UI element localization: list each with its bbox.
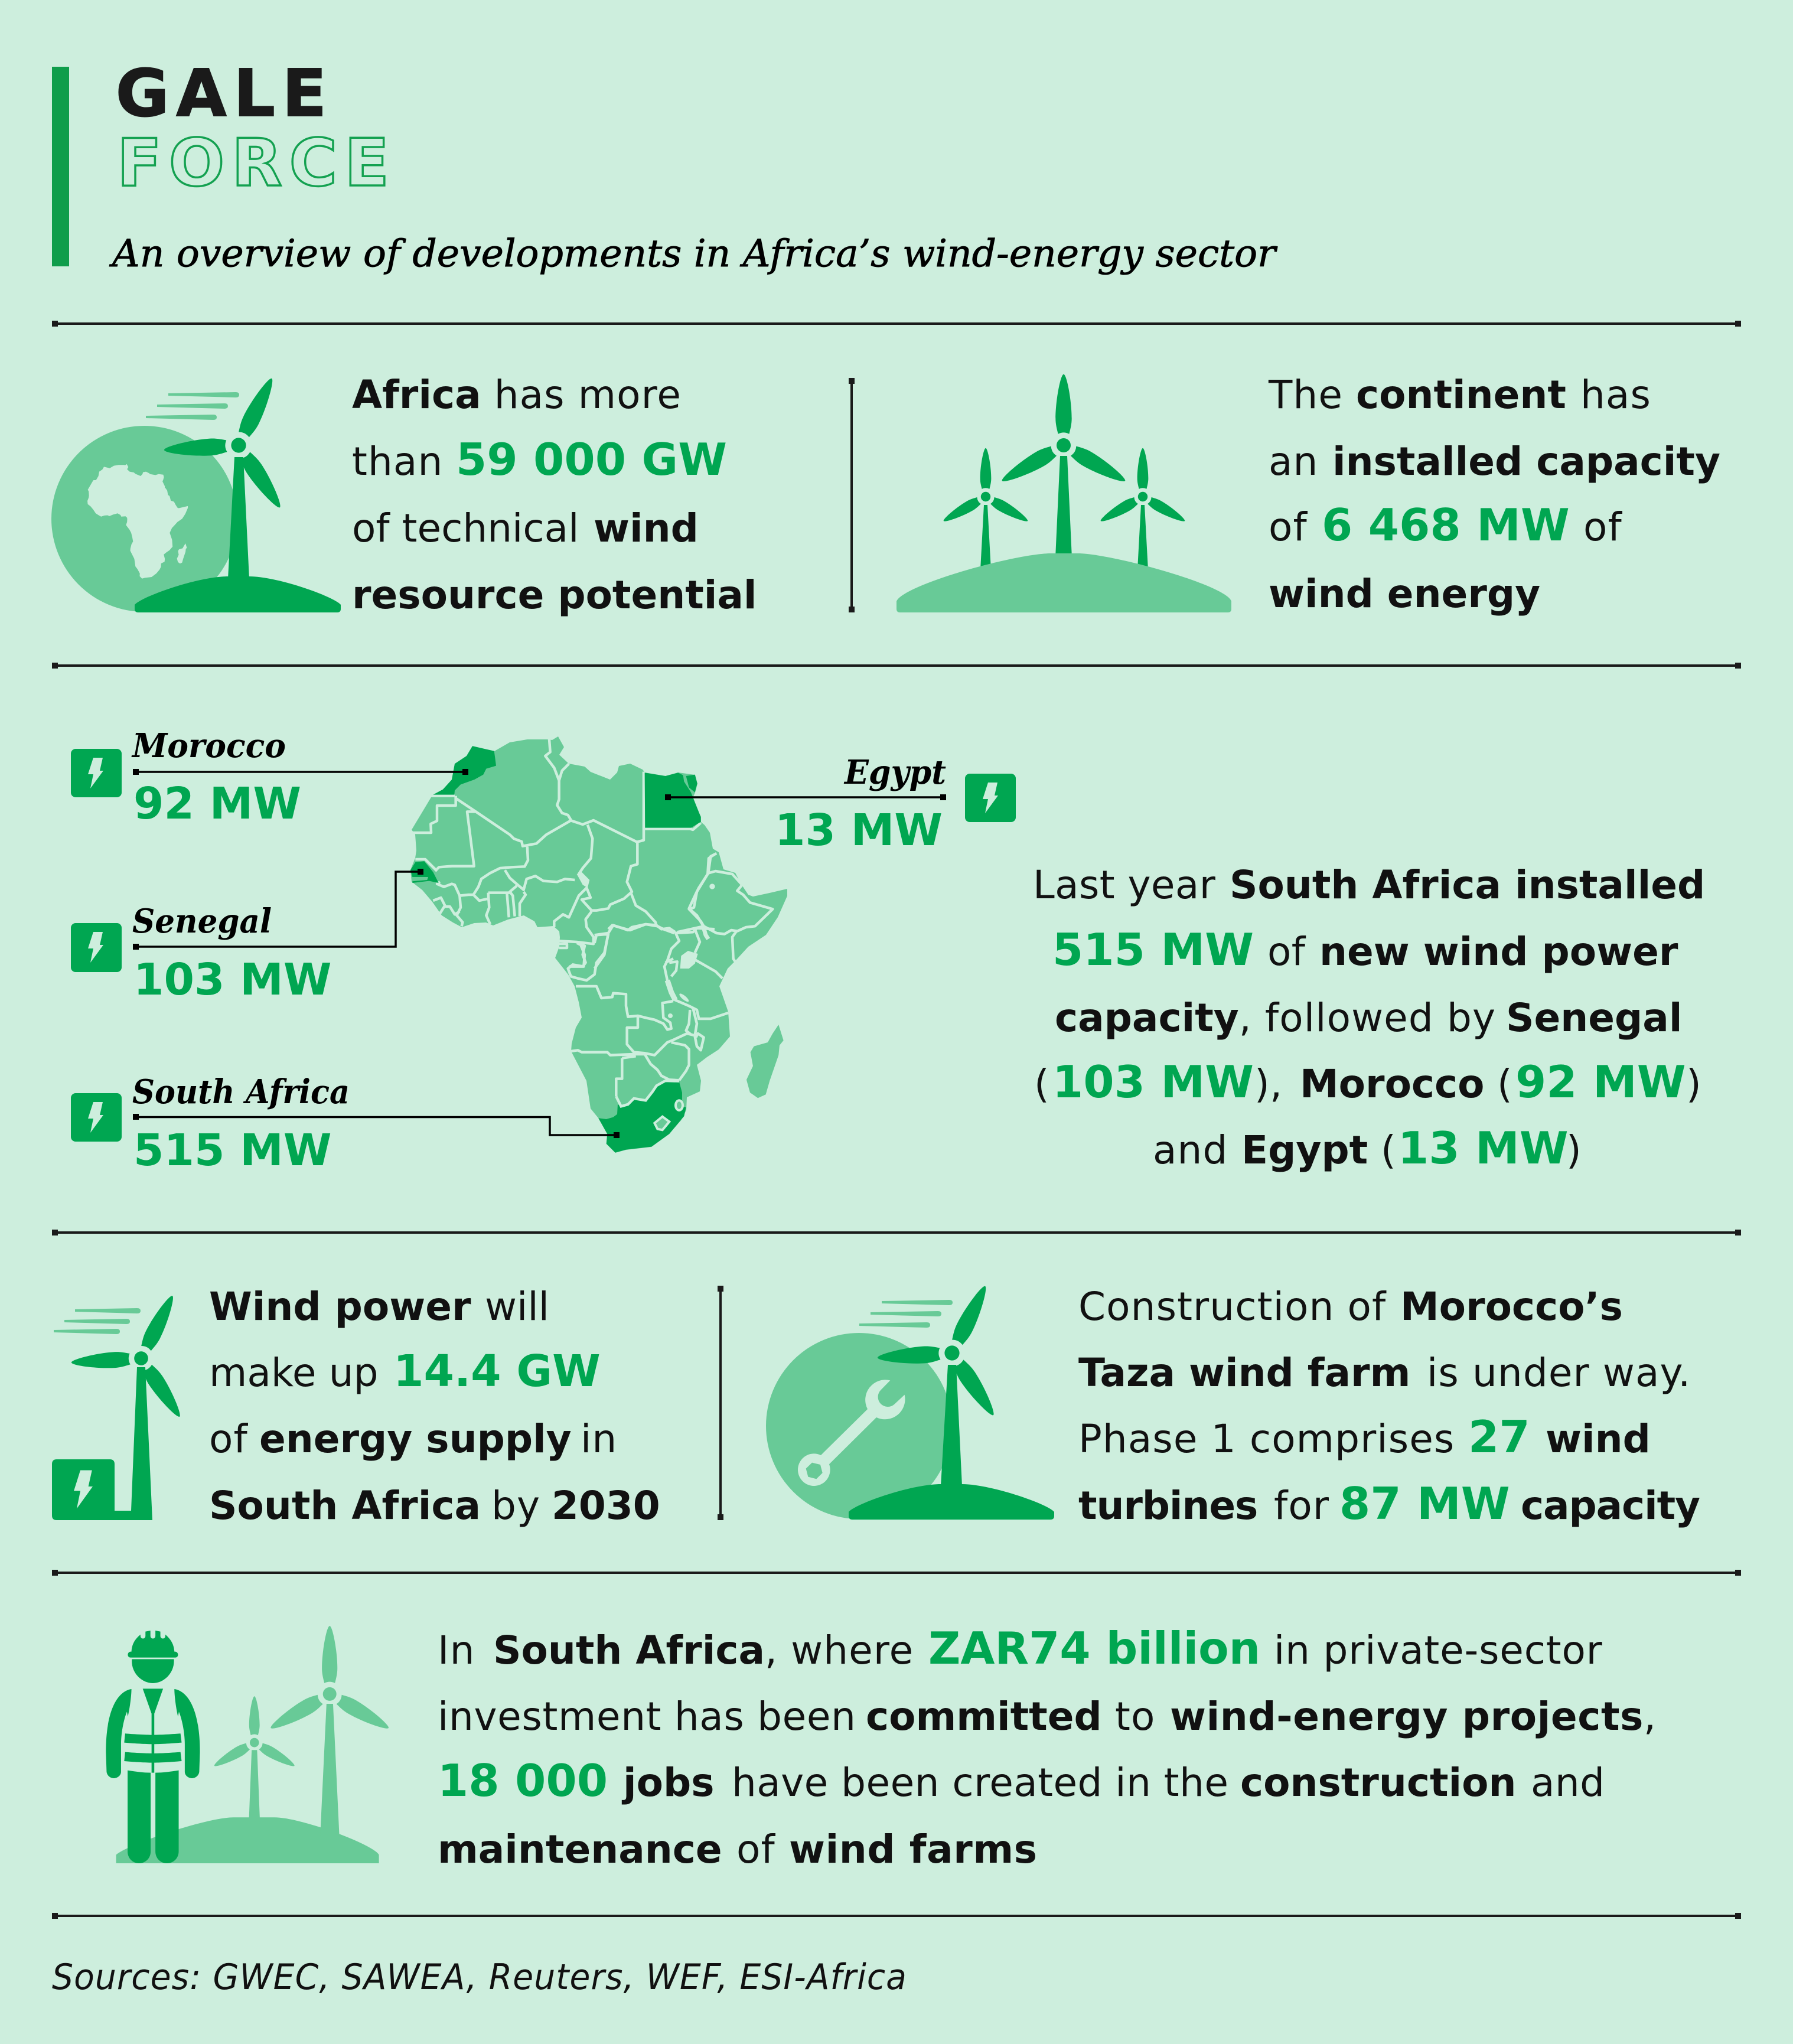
text: technical potential: of technical xyxy=(352,506,591,551)
text: energy supply by 2030: energy supply xyxy=(259,1416,572,1462)
text: energy supply by 2030: South Africa xyxy=(209,1483,481,1528)
text: Taza wind farm: Construction of xyxy=(1078,1284,1386,1329)
text: last year's installations: 92 MW xyxy=(1515,1056,1686,1108)
sources: Sources: GWEC, SAWEA, Reuters, WEF, ESI-Africa xyxy=(52,1957,907,1998)
text: last year's installations: , followed by xyxy=(1239,995,1509,1041)
text: installed capacity: has xyxy=(1580,372,1651,418)
map: Morocco highlighted xyxy=(433,746,496,795)
text: installed capacity: 6 468 MW xyxy=(1322,499,1570,551)
text: investment and jobs: wind-energy projects xyxy=(1170,1694,1644,1739)
worker figure xyxy=(106,1631,200,1863)
text: last year's installations: ( xyxy=(1034,1061,1049,1107)
text: investment and jobs: investment has been xyxy=(438,1694,869,1739)
text: investment and jobs: South Africa xyxy=(493,1628,765,1673)
text: investment and jobs: , where xyxy=(765,1628,927,1673)
text: last year's installations: 515 MW xyxy=(1052,924,1254,976)
text: technical potential: 59 000 GW xyxy=(456,433,727,485)
text: Taza wind farm: Phase 1 comprises xyxy=(1078,1416,1468,1462)
text: investment and jobs: committed xyxy=(866,1694,1102,1739)
callout: Egypt: Egypt xyxy=(843,753,946,792)
text: last year's installations: Last year xyxy=(1033,862,1215,908)
text: Taza wind farm: 87 MW xyxy=(1339,1478,1510,1530)
text: last year's installations: Egypt xyxy=(1241,1127,1368,1173)
text: energy supply by 2030: Wind power xyxy=(209,1284,471,1329)
map of Africa xyxy=(410,736,787,1153)
text: technical potential: wind xyxy=(594,506,699,551)
text: investment and jobs: maintenance xyxy=(438,1827,722,1872)
icon: turbine with power box xyxy=(52,1267,230,1520)
text: last year's installations: 13 MW xyxy=(1398,1122,1569,1174)
callout: Morocco: Morocco xyxy=(131,726,286,765)
text: last year's installations: ) xyxy=(1566,1127,1582,1173)
text: investment and jobs: In xyxy=(438,1628,475,1673)
callout: South Africa xyxy=(71,1072,620,1176)
text: investment and jobs: ZAR74 billion xyxy=(928,1622,1260,1674)
text: investment and jobs: wind farms xyxy=(789,1827,1038,1872)
text: installed capacity: of xyxy=(1269,504,1321,550)
text: last year's installations: and xyxy=(1153,1127,1241,1173)
text: technical potential: Africa has more xyxy=(352,372,682,418)
callout: Senegal xyxy=(71,869,423,1005)
text: last year's installations: Morocco xyxy=(1300,1061,1485,1107)
text: investment and jobs: , xyxy=(1644,1694,1657,1739)
text: last year's installations: ), xyxy=(1254,1061,1295,1107)
icon: globe with wind turbine xyxy=(51,348,341,612)
text: installed capacity: an xyxy=(1269,439,1332,484)
title: GALE: GALE xyxy=(116,56,327,131)
text: installed capacity: of xyxy=(1583,504,1622,550)
callout: Senegal: 103 MW xyxy=(133,954,332,1005)
subtitle: An overview of developments in Africa’s wind-energy sector xyxy=(109,232,1277,276)
text: energy supply by 2030: 2030 xyxy=(552,1483,660,1528)
text: investment and jobs: and xyxy=(1531,1760,1605,1805)
text: last year's installations: South Africa installed xyxy=(1230,862,1705,908)
text: Taza wind farm: capacity xyxy=(1521,1483,1700,1528)
text: Taza wind farm: Taza wind farm xyxy=(1078,1350,1410,1396)
callout: South Africa: 515 MW xyxy=(133,1125,332,1176)
icon: wrench and turbine xyxy=(766,1256,1054,1520)
text: energy supply by 2030: will xyxy=(485,1284,549,1329)
text: Taza wind farm: Morocco’s xyxy=(1400,1284,1623,1329)
callout: Egypt xyxy=(665,753,1016,856)
title accent bar xyxy=(52,67,69,266)
text: last year's installations: ( xyxy=(1497,1061,1512,1107)
text: Taza wind farm: for xyxy=(1274,1483,1342,1528)
text: last year's installations: capacity xyxy=(1055,995,1239,1041)
text: last year's installations: new wind power xyxy=(1319,929,1678,974)
title: FORCE (outlined): FORCE xyxy=(117,125,390,201)
text: installed capacity: The xyxy=(1269,372,1343,418)
icon: worker with turbines on a hill xyxy=(106,1626,392,1863)
text: last year's installations: 103 MW xyxy=(1052,1056,1254,1108)
text: investment and jobs: 18 000 xyxy=(438,1755,608,1807)
text: last year's installations: ) xyxy=(1686,1061,1701,1107)
callout: South Africa: South Africa xyxy=(132,1072,350,1111)
text: installed capacity: installed capacity xyxy=(1332,439,1720,484)
text: energy supply by 2030: by xyxy=(491,1483,553,1528)
callout: Senegal: Senegal xyxy=(132,902,272,941)
text: last year's installations: of xyxy=(1267,929,1318,974)
callout: Egypt: 13 MW xyxy=(775,805,943,856)
text: investment and jobs: jobs xyxy=(621,1760,715,1805)
text: Taza wind farm: is under way. xyxy=(1427,1350,1691,1396)
callout: Morocco: 92 MW xyxy=(133,778,301,829)
text: energy supply by 2030: in xyxy=(581,1416,617,1462)
text: Taza wind farm: 27 xyxy=(1468,1411,1530,1463)
text: Taza wind farm: wind xyxy=(1546,1416,1651,1462)
map: Senegal highlighted xyxy=(410,861,439,883)
text: Taza wind farm: turbines xyxy=(1078,1483,1257,1528)
text: energy supply by 2030: 14.4 GW xyxy=(393,1346,601,1397)
map: South Africa highlighted xyxy=(598,1081,686,1153)
wrench xyxy=(798,1380,905,1486)
icon: three wind turbines on a hill xyxy=(896,374,1231,612)
text: installed capacity: wind energy xyxy=(1269,571,1540,617)
text: energy supply by 2030: of xyxy=(209,1416,261,1462)
text: investment and jobs: construction xyxy=(1240,1760,1516,1805)
map: Egypt highlighted xyxy=(645,772,701,828)
text: energy supply by 2030: make up xyxy=(209,1350,391,1396)
text: investment and jobs: in private-sector xyxy=(1274,1628,1603,1673)
text: investment and jobs: to xyxy=(1115,1694,1169,1739)
title block xyxy=(52,56,1277,276)
text: investment and jobs: have been created in the xyxy=(732,1760,1241,1805)
callout: Morocco xyxy=(71,726,468,829)
text: technical potential: resource potential xyxy=(352,572,757,618)
text: last year's installations: ( xyxy=(1381,1127,1396,1173)
text: last year's installations: Senegal xyxy=(1506,995,1682,1041)
text: investment and jobs: of xyxy=(736,1827,788,1872)
text: installed capacity: continent xyxy=(1356,372,1566,418)
text: technical potential: than xyxy=(352,439,456,484)
